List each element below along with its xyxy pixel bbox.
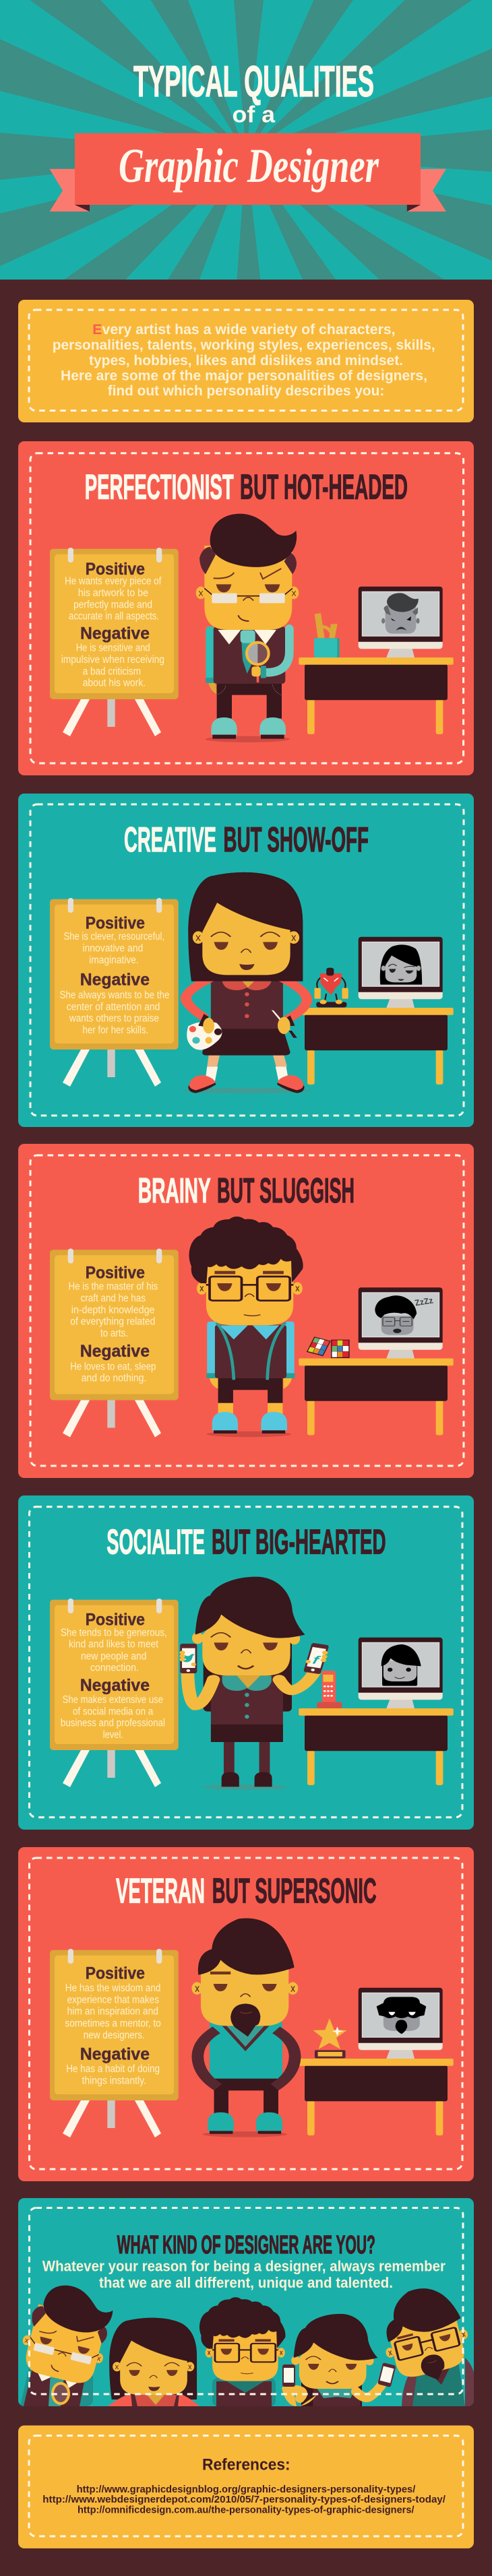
ribbon banner: Graphic Designer	[119, 139, 379, 193]
easel text: creative: She is clever, resourceful,	[63, 931, 164, 942]
panel: veteran	[18, 1847, 474, 2181]
screen face: asleep: ZzZz	[414, 1295, 434, 1308]
title: of a	[232, 102, 276, 128]
panel: what kind of designer are you	[16, 2198, 476, 2406]
easel text: socialite: new people and	[81, 1650, 146, 1662]
easel text: veteran	[65, 1964, 161, 2086]
group member: veteran	[386, 2288, 474, 2406]
heading: perfectionist: PERFECTIONIST	[85, 468, 234, 507]
panel: intro: personalities, talents, working styles, experiences, skills,	[53, 337, 435, 353]
easel text: veteran: new designers.	[84, 2030, 145, 2041]
desk	[299, 1008, 454, 1085]
group member: perfectionist	[20, 2285, 113, 2406]
easel text: brainy: craft and he has	[81, 1293, 146, 1304]
screen face: asleep	[375, 1295, 434, 1335]
group member: creative	[108, 2318, 199, 2406]
title	[133, 57, 374, 128]
panel: intro: Here are some of the major personalities of designers,	[61, 368, 427, 384]
panel: intro: find out which personality describes you:	[108, 383, 384, 399]
easel text: socialite: level.	[103, 1729, 123, 1741]
easel text: perfectionist: He is sensitive and	[76, 643, 150, 654]
easel text: brainy: He loves to eat, sleep	[70, 1361, 156, 1372]
easel text: brainy: Positive	[86, 1263, 145, 1282]
easel text: perfectionist: accurate in all aspects.	[69, 610, 159, 622]
heading: brainy	[138, 1171, 355, 1211]
panel: creative	[18, 794, 474, 1127]
easel board	[50, 548, 179, 736]
closing text	[42, 2258, 445, 2291]
easel text: creative: Negative	[80, 971, 150, 990]
easel text: socialite: connection.	[90, 1663, 139, 1674]
easel text: socialite: Negative	[80, 1676, 150, 1695]
screen face: creative	[380, 944, 422, 985]
easel text: veteran: experience that makes	[67, 1994, 159, 2005]
monitor	[359, 1287, 443, 1358]
group member: brainy	[199, 2297, 285, 2406]
easel text: perfectionist	[61, 560, 164, 689]
heading: veteran: VETERAN	[116, 1871, 205, 1910]
easel text: creative: Positive	[86, 913, 145, 932]
easel text: socialite: business and professional	[61, 1718, 165, 1729]
star trophy	[313, 2018, 346, 2058]
phone: facebook	[303, 1642, 331, 1675]
easel text: perfectionist: He wants every piece of	[65, 576, 162, 587]
easel board	[50, 1249, 179, 1438]
character: perfectionist	[206, 626, 290, 742]
phone: twitter	[179, 1644, 197, 1673]
desk	[299, 1358, 454, 1435]
desk	[299, 1708, 454, 1785]
easel text: brainy: to arts.	[100, 1328, 128, 1339]
easel text: socialite	[61, 1611, 167, 1741]
easel text: brainy: and do nothing.	[82, 1373, 146, 1384]
panel: brainy	[18, 1144, 474, 1478]
header sunburst	[0, 0, 492, 280]
character: brainy	[206, 1322, 295, 1437]
character group	[16, 2278, 476, 2406]
monitor	[359, 587, 443, 657]
heading: brainy: BRAINY	[138, 1171, 211, 1211]
easel text: socialite: of social media on a	[73, 1706, 154, 1717]
dashed frame	[30, 2208, 463, 2394]
easel text: creative: imaginative.	[89, 955, 139, 966]
veteran glasses	[394, 2327, 460, 2360]
easel board	[50, 898, 179, 1087]
easel text: creative: wants others to praise	[69, 1013, 159, 1025]
easel text: brainy: of everything related	[70, 1316, 155, 1328]
character head: perfectionist	[196, 514, 299, 630]
screen face: veteran	[377, 1997, 426, 2034]
pencil cup	[314, 613, 340, 657]
closing text: that we are all different, unique and talented.	[99, 2274, 393, 2291]
character head: brainy	[189, 1217, 303, 1325]
easel text: socialite: kind and likes to meet	[69, 1639, 159, 1650]
easel text: creative: center of attention and	[67, 1001, 160, 1012]
easel text: perfectionist: his artwork to be	[78, 587, 148, 599]
character: veteran	[197, 2022, 295, 2137]
references heading: References:	[202, 2456, 290, 2474]
easel text: socialite: She makes extensive use	[63, 1694, 163, 1706]
easel text: creative	[59, 913, 169, 1036]
panel: intro	[18, 300, 474, 422]
easel text: perfectionist: Negative	[80, 624, 150, 643]
easel text: perfectionist: a bad criticism	[83, 666, 141, 678]
panel: intro: types, hobbies, likes and dislikes and mindset.	[89, 353, 403, 368]
desk	[299, 657, 454, 734]
easel text: creative: She always wants to be the	[59, 990, 169, 1001]
easel text: veteran: He has a habit of doing	[66, 2063, 160, 2075]
robot toy	[314, 968, 348, 1007]
heading: socialite: SOCIALITE	[106, 1523, 205, 1562]
desk telephone	[317, 1671, 342, 1708]
references list	[42, 2484, 446, 2516]
easel text: veteran: sometimes a mentor, to	[65, 2018, 161, 2029]
character: socialite	[179, 1637, 331, 1790]
heading: creative: CREATIVE	[124, 820, 216, 860]
easel text: veteran: He has the wisdom and	[65, 1983, 160, 1994]
character head: creative	[188, 872, 303, 981]
easel board	[50, 1599, 179, 1787]
phone: facebook: f	[311, 1654, 321, 1667]
heading: brainy: BUT SLUGGISH	[217, 1171, 355, 1211]
references list: http://www.graphicdesignblog.org/graphic-designers-personality-types/	[77, 2484, 416, 2495]
ribbon banner	[50, 133, 446, 212]
group member: socialite	[282, 2314, 396, 2406]
monitor	[359, 937, 443, 1008]
easel text: veteran: Positive	[86, 1964, 145, 1983]
character: creative	[183, 872, 311, 1093]
easel text: socialite: She tends to be generous,	[61, 1627, 167, 1638]
easel text: brainy: in-depth knowledge	[71, 1304, 155, 1316]
easel text: veteran: things instantly.	[82, 2075, 146, 2086]
references list: http://omnificdesign.com.au/the-personality-types-of-graphic-designers/	[78, 2505, 414, 2516]
character head: socialite	[192, 1577, 305, 1675]
panel: intro: Every artist has a wide variety of characters,	[92, 322, 396, 337]
monitor	[359, 1988, 443, 2059]
easel text: perfectionist: Positive	[86, 560, 145, 579]
easel board	[50, 1949, 179, 2137]
easel text: socialite: Positive	[86, 1611, 145, 1630]
easel text: perfectionist: perfectly made and	[73, 599, 152, 610]
panel: references	[18, 2425, 474, 2548]
heading: veteran	[116, 1871, 377, 1910]
monitor	[359, 1638, 443, 1708]
easel text: veteran: him an inspiration and	[67, 2006, 158, 2018]
screen face: hearts	[381, 1644, 421, 1686]
easel text: brainy: He is the master of his	[69, 1281, 158, 1293]
easel text: perfectionist: about his work.	[83, 678, 146, 689]
desk	[299, 2059, 454, 2135]
easel text: creative: innovative and	[82, 943, 143, 955]
character head: veteran	[191, 1919, 298, 2036]
easel text: brainy	[69, 1263, 158, 1384]
heading: socialite	[106, 1523, 386, 1562]
easel text: creative: her for her skills.	[82, 1025, 148, 1036]
panel: perfectionist	[18, 441, 474, 775]
easel text: perfectionist: impulsive when receiving	[61, 654, 164, 666]
easel text: veteran: Negative	[80, 2044, 150, 2063]
rubik's cubes	[307, 1337, 350, 1358]
heading: creative: BUT SHOW-OFF	[224, 820, 369, 860]
panel: socialite	[18, 1495, 474, 1830]
closing text: Whatever your reason for being a designer, always remember	[42, 2258, 445, 2275]
screen face: angry	[381, 593, 420, 634]
easel text: brainy: Negative	[80, 1342, 150, 1361]
references list: http://www.webdesignerdepot.com/2010/05/7-personality-types-of-designers-today/	[42, 2494, 446, 2505]
